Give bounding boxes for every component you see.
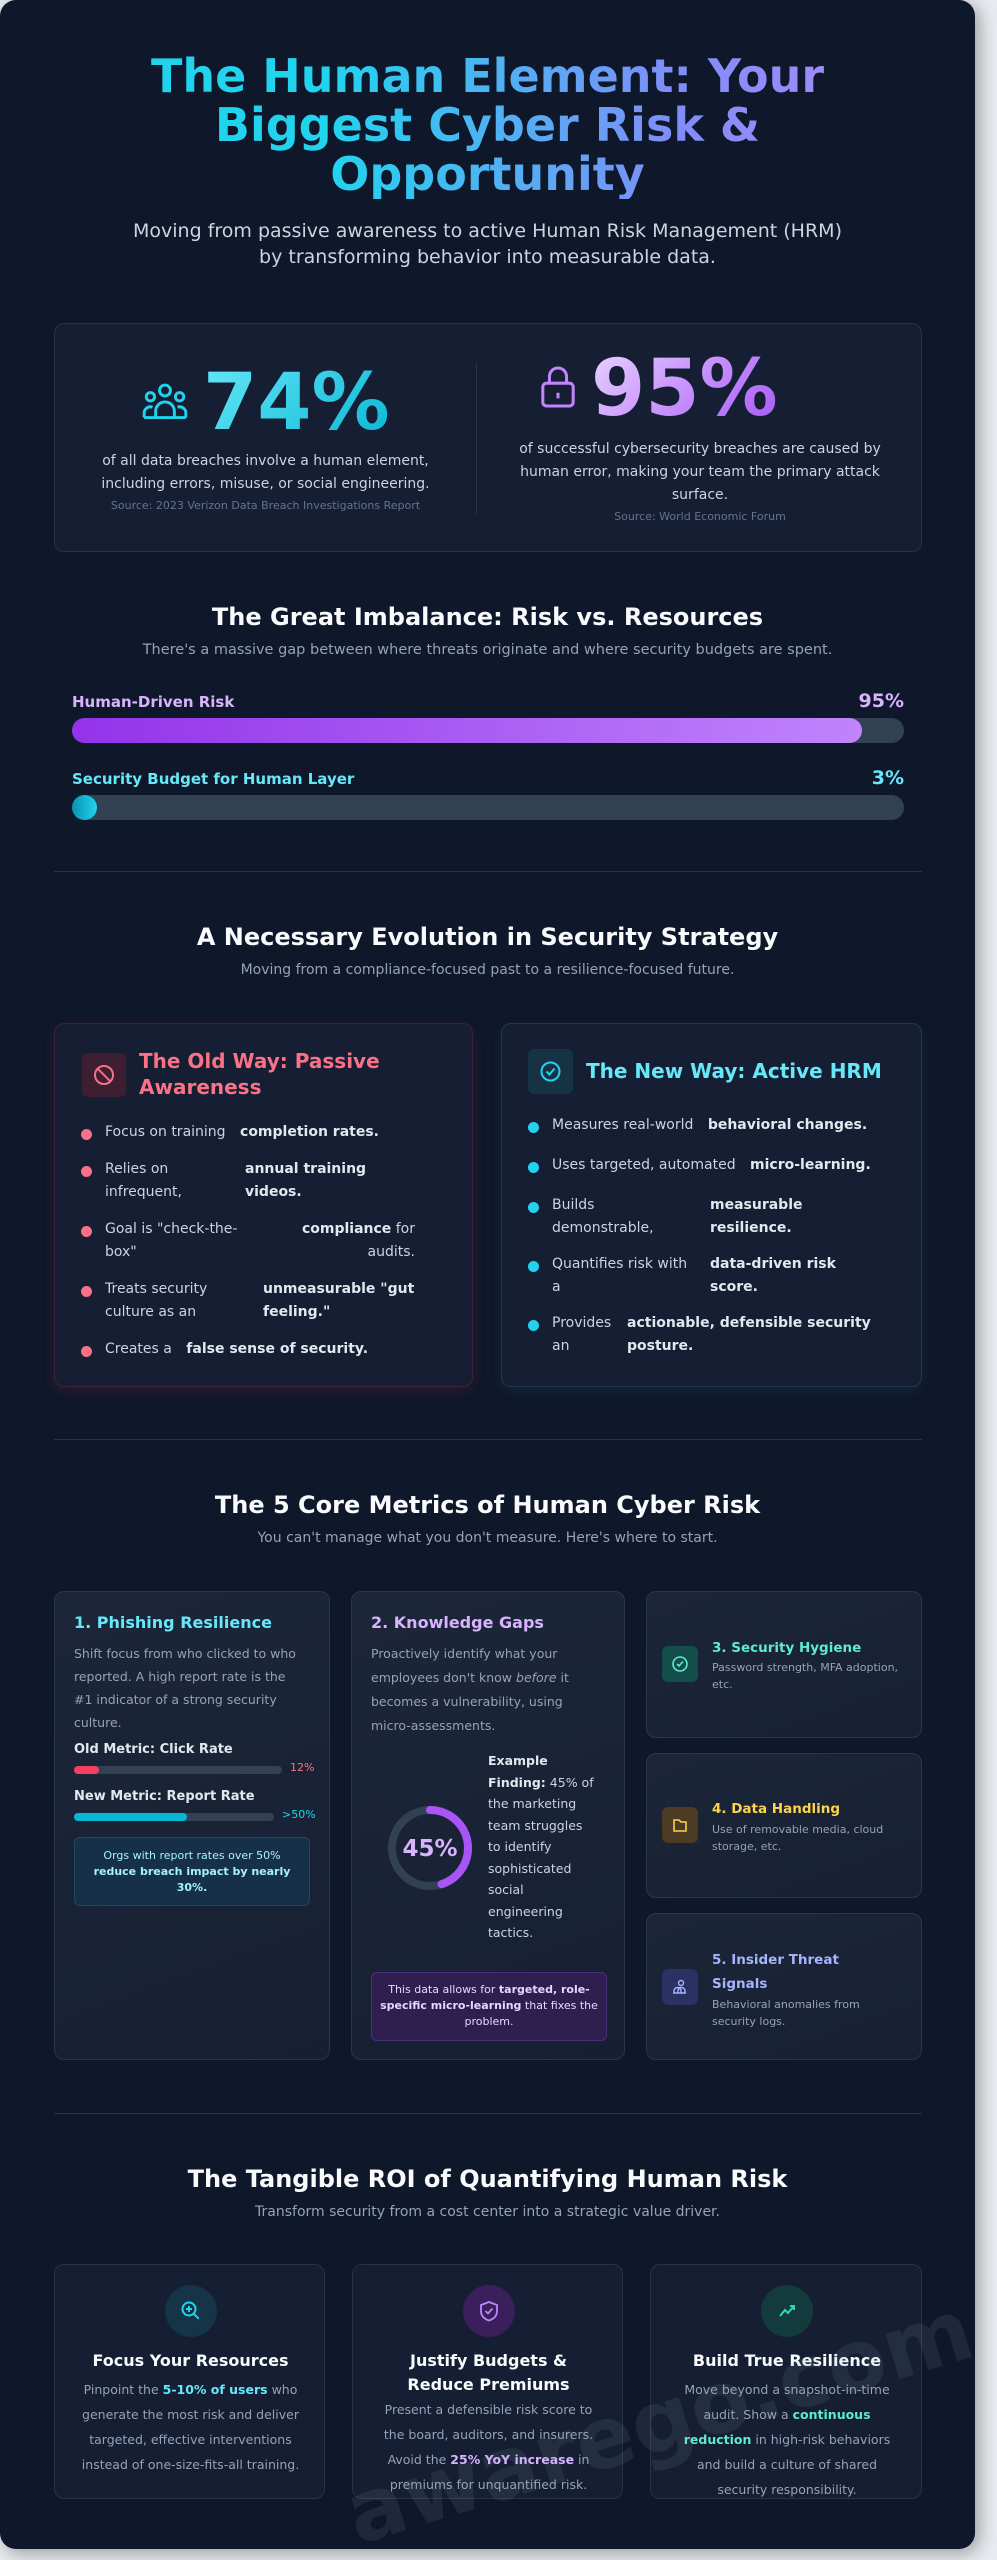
- panel: insider threat: [646, 1913, 922, 2060]
- title: Reduce Premiums: [407, 2375, 570, 2394]
- bar: new metric: [74, 1789, 316, 1821]
- bullet list: compliance for audits.: [302, 1221, 415, 1260]
- text: Password strength, MFA adoption, etc.: [712, 1661, 898, 1691]
- panel: knowledge gaps: [351, 1591, 625, 2060]
- bullet list: completion rates.: [240, 1124, 379, 1140]
- bar: new metric: New Metric: Report Rate: [74, 1789, 255, 1804]
- heading: The New Way: Active HRM: [586, 1059, 882, 1083]
- bar: security budget: 3%: [872, 767, 904, 789]
- bullet list: Treats security culture as an: [105, 1281, 207, 1320]
- bar: old metric: [74, 1742, 314, 1774]
- bullet list: data-driven risk score.: [710, 1256, 836, 1295]
- title: [407, 2351, 570, 2394]
- subtitle: [133, 220, 842, 268]
- bullet list: Provides an: [552, 1315, 611, 1354]
- panel: key stats: [54, 323, 922, 552]
- callout: This data allows for targeted, role-specific micro-learning that fixes the problem.: [380, 1983, 598, 2028]
- panel: justify budgets: [352, 2264, 623, 2499]
- icon: trend up: [761, 2285, 813, 2337]
- bullet list: Uses targeted, automated: [552, 1157, 736, 1173]
- title: 3. Security Hygiene: [712, 1640, 861, 1656]
- description: of successful cybersecurity breaches are caused by human error, making your team the primary attack surface.: [519, 441, 881, 503]
- stat: 95%: [519, 344, 881, 523]
- description: of all data breaches involve a human element, including errors, misuse, or social engineering.: [101, 453, 430, 492]
- panel: old way: [54, 1023, 473, 1387]
- text: Proactively identify what your employees don't know before it becomes a vulnerability, using micro-assessments.: [371, 1646, 569, 1733]
- bullet list: behavioral changes.: [708, 1117, 867, 1133]
- bullet list: Measures real-world: [552, 1117, 693, 1133]
- bullet list: actionable, defensible security posture.: [627, 1315, 871, 1354]
- bullet list: Creates a: [105, 1341, 172, 1357]
- panel: data handling: [646, 1753, 922, 1898]
- bullet list: unmeasurable "gut feeling.": [263, 1281, 414, 1320]
- icon: check badge: [662, 1646, 698, 1682]
- heading: great imbalance: The Great Imbalance: Risk vs. Resources: [212, 603, 763, 631]
- bullet list: [528, 1117, 871, 1354]
- icon: check circle: [528, 1049, 573, 1094]
- donut chart: 45%: [388, 1806, 472, 1890]
- bullet list: Focus on training: [105, 1124, 226, 1140]
- bar: old metric: 12%: [290, 1761, 314, 1774]
- stat: 74%: [101, 358, 430, 512]
- example finding: Example Finding: 45% of the marketing team struggles to identify sophisticated social engineering tactics.: [488, 1753, 594, 1940]
- bullet list: [81, 1124, 415, 1357]
- text: Behavioral anomalies from security logs.: [712, 1998, 860, 2028]
- title: Focus Your Resources: [92, 2351, 289, 2370]
- callout: [74, 1837, 310, 1906]
- bar: human-driven risk: [72, 690, 904, 743]
- subtitle: Moving from passive awareness to active Human Risk Management (HRM): [133, 220, 842, 242]
- title: The Human Element: Your Biggest Cyber Risk & Opportunity: [151, 49, 824, 201]
- text: Present a defensible risk score to the board, auditors, and insurers. Avoid the 25% YoY increase in premiums for unquantified risk.: [384, 2402, 593, 2492]
- number: 74%: [203, 358, 390, 448]
- subheading: There's a massive gap between where threats originate and where security budgets are spent.: [143, 642, 832, 658]
- subtitle: by transforming behavior into measurable data.: [259, 246, 716, 268]
- bar: new metric: >50%: [282, 1808, 316, 1821]
- panel: security hygiene: [646, 1591, 922, 1738]
- number: 95%: [591, 344, 778, 434]
- bar chart: imbalance: [72, 690, 904, 820]
- icon: magnifier: [165, 2285, 217, 2337]
- text: Pinpoint the 5-10% of users who generate the most risk and deliver targeted, effective interventions instead of one-size-fits-all training.: [82, 2382, 299, 2472]
- text: Move beyond a snapshot-in-time audit. Show a continuous reduction in high-risk behaviors and build a culture of shared security responsibility.: [684, 2382, 890, 2497]
- text: Use of removable media, cloud storage, etc.: [712, 1823, 883, 1853]
- bullet list: Quantifies risk with a: [552, 1256, 687, 1295]
- callout: Orgs with report rates over 50% reduce breach impact by nearly 30%.: [94, 1849, 290, 1894]
- heading: evolution: A Necessary Evolution in Security Strategy: [197, 923, 778, 951]
- bullet list: Relies on infrequent,: [105, 1161, 182, 1200]
- title: 1. Phishing Resilience: [74, 1613, 272, 1632]
- bar: security budget: [72, 767, 904, 820]
- callout: [371, 1972, 607, 2041]
- bullet list: measurable resilience.: [710, 1197, 802, 1236]
- title: 2. Knowledge Gaps: [371, 1613, 544, 1632]
- icon: people: [142, 384, 188, 419]
- bar: old metric: Old Metric: Click Rate: [74, 1742, 233, 1757]
- bullet list: Goal is "check-the-box": [105, 1221, 237, 1260]
- source: Source: 2023 Verizon Data Breach Investigations Report: [111, 499, 420, 512]
- panel: build resilience: [650, 2264, 922, 2499]
- heading: The Old Way: Passive Awareness: [139, 1049, 380, 1099]
- panel: new way: [501, 1023, 922, 1387]
- bullet list: Builds demonstrable,: [552, 1197, 654, 1236]
- icon: prohibited: [82, 1053, 126, 1097]
- icon: shield: [463, 2285, 515, 2337]
- subheading: You can't manage what you don't measure. Here's where to start.: [257, 1530, 718, 1546]
- icon: user: [662, 1969, 698, 2005]
- title: Justify Budgets &: [410, 2351, 567, 2370]
- subheading: Transform security from a cost center into a strategic value driver.: [255, 2204, 720, 2220]
- donut chart: 45%: 45%: [402, 1836, 458, 1862]
- title: 5. Insider Threat Signals: [712, 1952, 839, 1992]
- bullet list: false sense of security.: [186, 1341, 368, 1357]
- bullet list: annual training videos.: [245, 1161, 366, 1200]
- panel: focus resources: [54, 2264, 325, 2499]
- subheading: Moving from a compliance-focused past to a resilience-focused future.: [241, 962, 734, 978]
- icon: folder: [662, 1807, 698, 1843]
- source: Source: World Economic Forum: [614, 510, 786, 523]
- heading: 5 core metrics: The 5 Core Metrics of Human Cyber Risk: [215, 1491, 760, 1519]
- icon: lock: [541, 366, 575, 408]
- title: 4. Data Handling: [712, 1801, 840, 1817]
- bar: human-driven risk: Human-Driven Risk: [72, 693, 234, 711]
- text: Shift focus from who clicked to who reported. A high report rate is the #1 indicator of a strong security culture.: [74, 1646, 296, 1730]
- bar: human-driven risk: 95%: [859, 690, 904, 712]
- title: Build True Resilience: [693, 2351, 881, 2370]
- panel: phishing resilience: [54, 1591, 330, 2060]
- bullet list: micro-learning.: [750, 1157, 871, 1173]
- bar: security budget: Security Budget for Human Layer: [72, 770, 354, 788]
- heading: ROI: The Tangible ROI of Quantifying Human Risk: [188, 2165, 787, 2193]
